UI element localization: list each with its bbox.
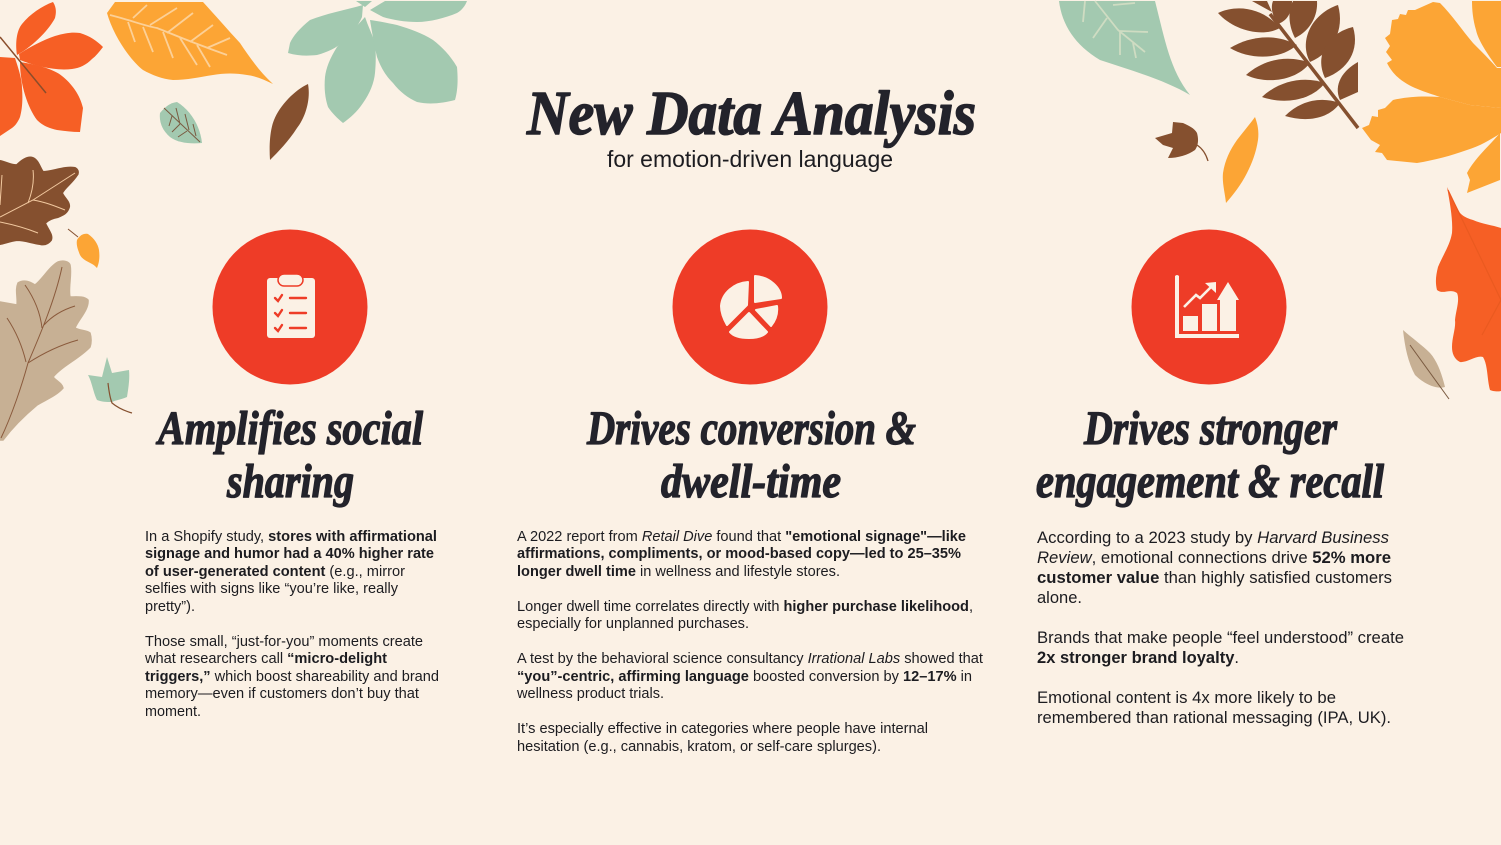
leaf: slender orange, right — [1223, 106, 1258, 203]
text: conversion body: It’s especially effective in categories where people have internal — [517, 721, 928, 737]
text: social sharing body: moment. — [145, 704, 201, 720]
text: conversion body: A 2022 report from Retail Dive found that "emotional signage"—like — [517, 529, 966, 545]
text: social sharing body — [144, 529, 439, 720]
icon: pie chart — [672, 230, 828, 384]
text: conversion body: A test by the behavioral science consultancy Irrational Labs showed that — [517, 651, 983, 667]
leaf: small green — [160, 102, 202, 143]
panel: engagement and recall — [1036, 230, 1404, 727]
heading: amplifies social sharing: sharing — [226, 455, 354, 508]
text: social sharing body: memory—even if customers don’t buy that — [145, 686, 419, 702]
heading: amplifies social sharing: Amplifies social — [155, 402, 424, 455]
text: social sharing body: In a Shopify study, stores with affirmational — [145, 529, 437, 545]
text: conversion body: wellness product trials. — [516, 686, 664, 702]
icon: clipboard — [212, 230, 368, 384]
title — [526, 80, 976, 172]
heading: drives stronger engagement and recall: engagement & recall — [1036, 455, 1385, 508]
heading: drives conversion and dwell-time: Drives conversion & — [586, 402, 916, 455]
text: engagement body — [1037, 528, 1404, 727]
text: engagement body: Brands that make people “feel understood” create — [1037, 628, 1404, 647]
text: conversion body: affirmations, compliments, or mood-based copy—led to 25–35% — [517, 546, 961, 562]
leaf: small brown maple — [1155, 122, 1208, 161]
text: social sharing body: Those small, “just-for-you” moments create — [145, 634, 423, 650]
subtitle: for emotion-driven language — [607, 146, 893, 172]
leaf: red-orange oak, right edge — [1436, 187, 1501, 391]
text: social sharing body: signage and humor had a 40% higher rate — [145, 546, 434, 562]
text: conversion body — [516, 529, 983, 755]
leaf: red-orange chestnut, top left — [0, 2, 103, 136]
icon: growth chart — [1132, 230, 1286, 384]
title heading: New Data Analysis — [526, 80, 976, 148]
heading: drives stronger engagement and recall: Drives stronger — [1083, 402, 1338, 455]
text: conversion body: especially for unplanned purchases. — [517, 616, 749, 632]
leaf: brown oak, left edge — [0, 157, 78, 244]
leaf: orange, top left — [107, 2, 273, 84]
leaf: brown slender — [270, 73, 312, 160]
heading: drives conversion and dwell-time — [586, 402, 916, 508]
text: conversion body: “you”-centric, affirming language boosted conversion by 12–17% in — [517, 669, 972, 685]
text: engagement body: customer value than highly satisfied customers — [1037, 568, 1392, 587]
text: engagement body: remembered than rational messaging (IPA, UK). — [1037, 708, 1391, 727]
text: engagement body: Emotional content is 4x more likely to be — [1037, 688, 1336, 707]
text: engagement body: alone. — [1037, 588, 1082, 607]
leaf: green, top right — [1059, 1, 1190, 95]
text: conversion body: hesitation (e.g., cannabis, kratom, or self-care splurges). — [517, 739, 881, 755]
leaf: small orange, left — [68, 229, 99, 268]
text: engagement body: 2x stronger brand loyalty. — [1037, 648, 1239, 667]
text: social sharing body: of user-generated content (e.g., mirror — [145, 564, 405, 580]
leaf: tan oak, left edge — [0, 261, 91, 440]
leaf: orange serrated, top right — [1362, 1, 1501, 193]
text: social sharing body: triggers,” which boost shareability and brand — [145, 669, 439, 685]
text: social sharing body: what researchers call “micro-delight — [144, 651, 387, 667]
panel: social sharing — [144, 230, 439, 720]
heading: drives stronger engagement and recall — [1036, 402, 1385, 508]
heading: drives conversion and dwell-time: dwell-time — [661, 455, 841, 508]
text: social sharing body: selfies with signs like “you’re like, really — [145, 581, 399, 597]
text: social sharing body: pretty”). — [145, 599, 195, 615]
text: engagement body: Review, emotional connections drive 52% more — [1037, 548, 1391, 567]
leaf: brown fern, top right — [1218, 1, 1358, 128]
heading: amplifies social sharing — [155, 402, 424, 508]
text: conversion body: longer dwell time in wellness and lifestyle stores. — [517, 564, 840, 580]
text: conversion body: Longer dwell time correlates directly with higher purchase likelihood, — [517, 599, 973, 615]
panel: conversion and dwell-time — [516, 230, 983, 755]
text: engagement body: According to a 2023 study by Harvard Business — [1037, 528, 1389, 547]
leaf: small green maple — [88, 357, 132, 413]
leaf: small tan, right — [1403, 330, 1449, 399]
leaf: green chestnut, top centre-left — [288, 1, 467, 123]
